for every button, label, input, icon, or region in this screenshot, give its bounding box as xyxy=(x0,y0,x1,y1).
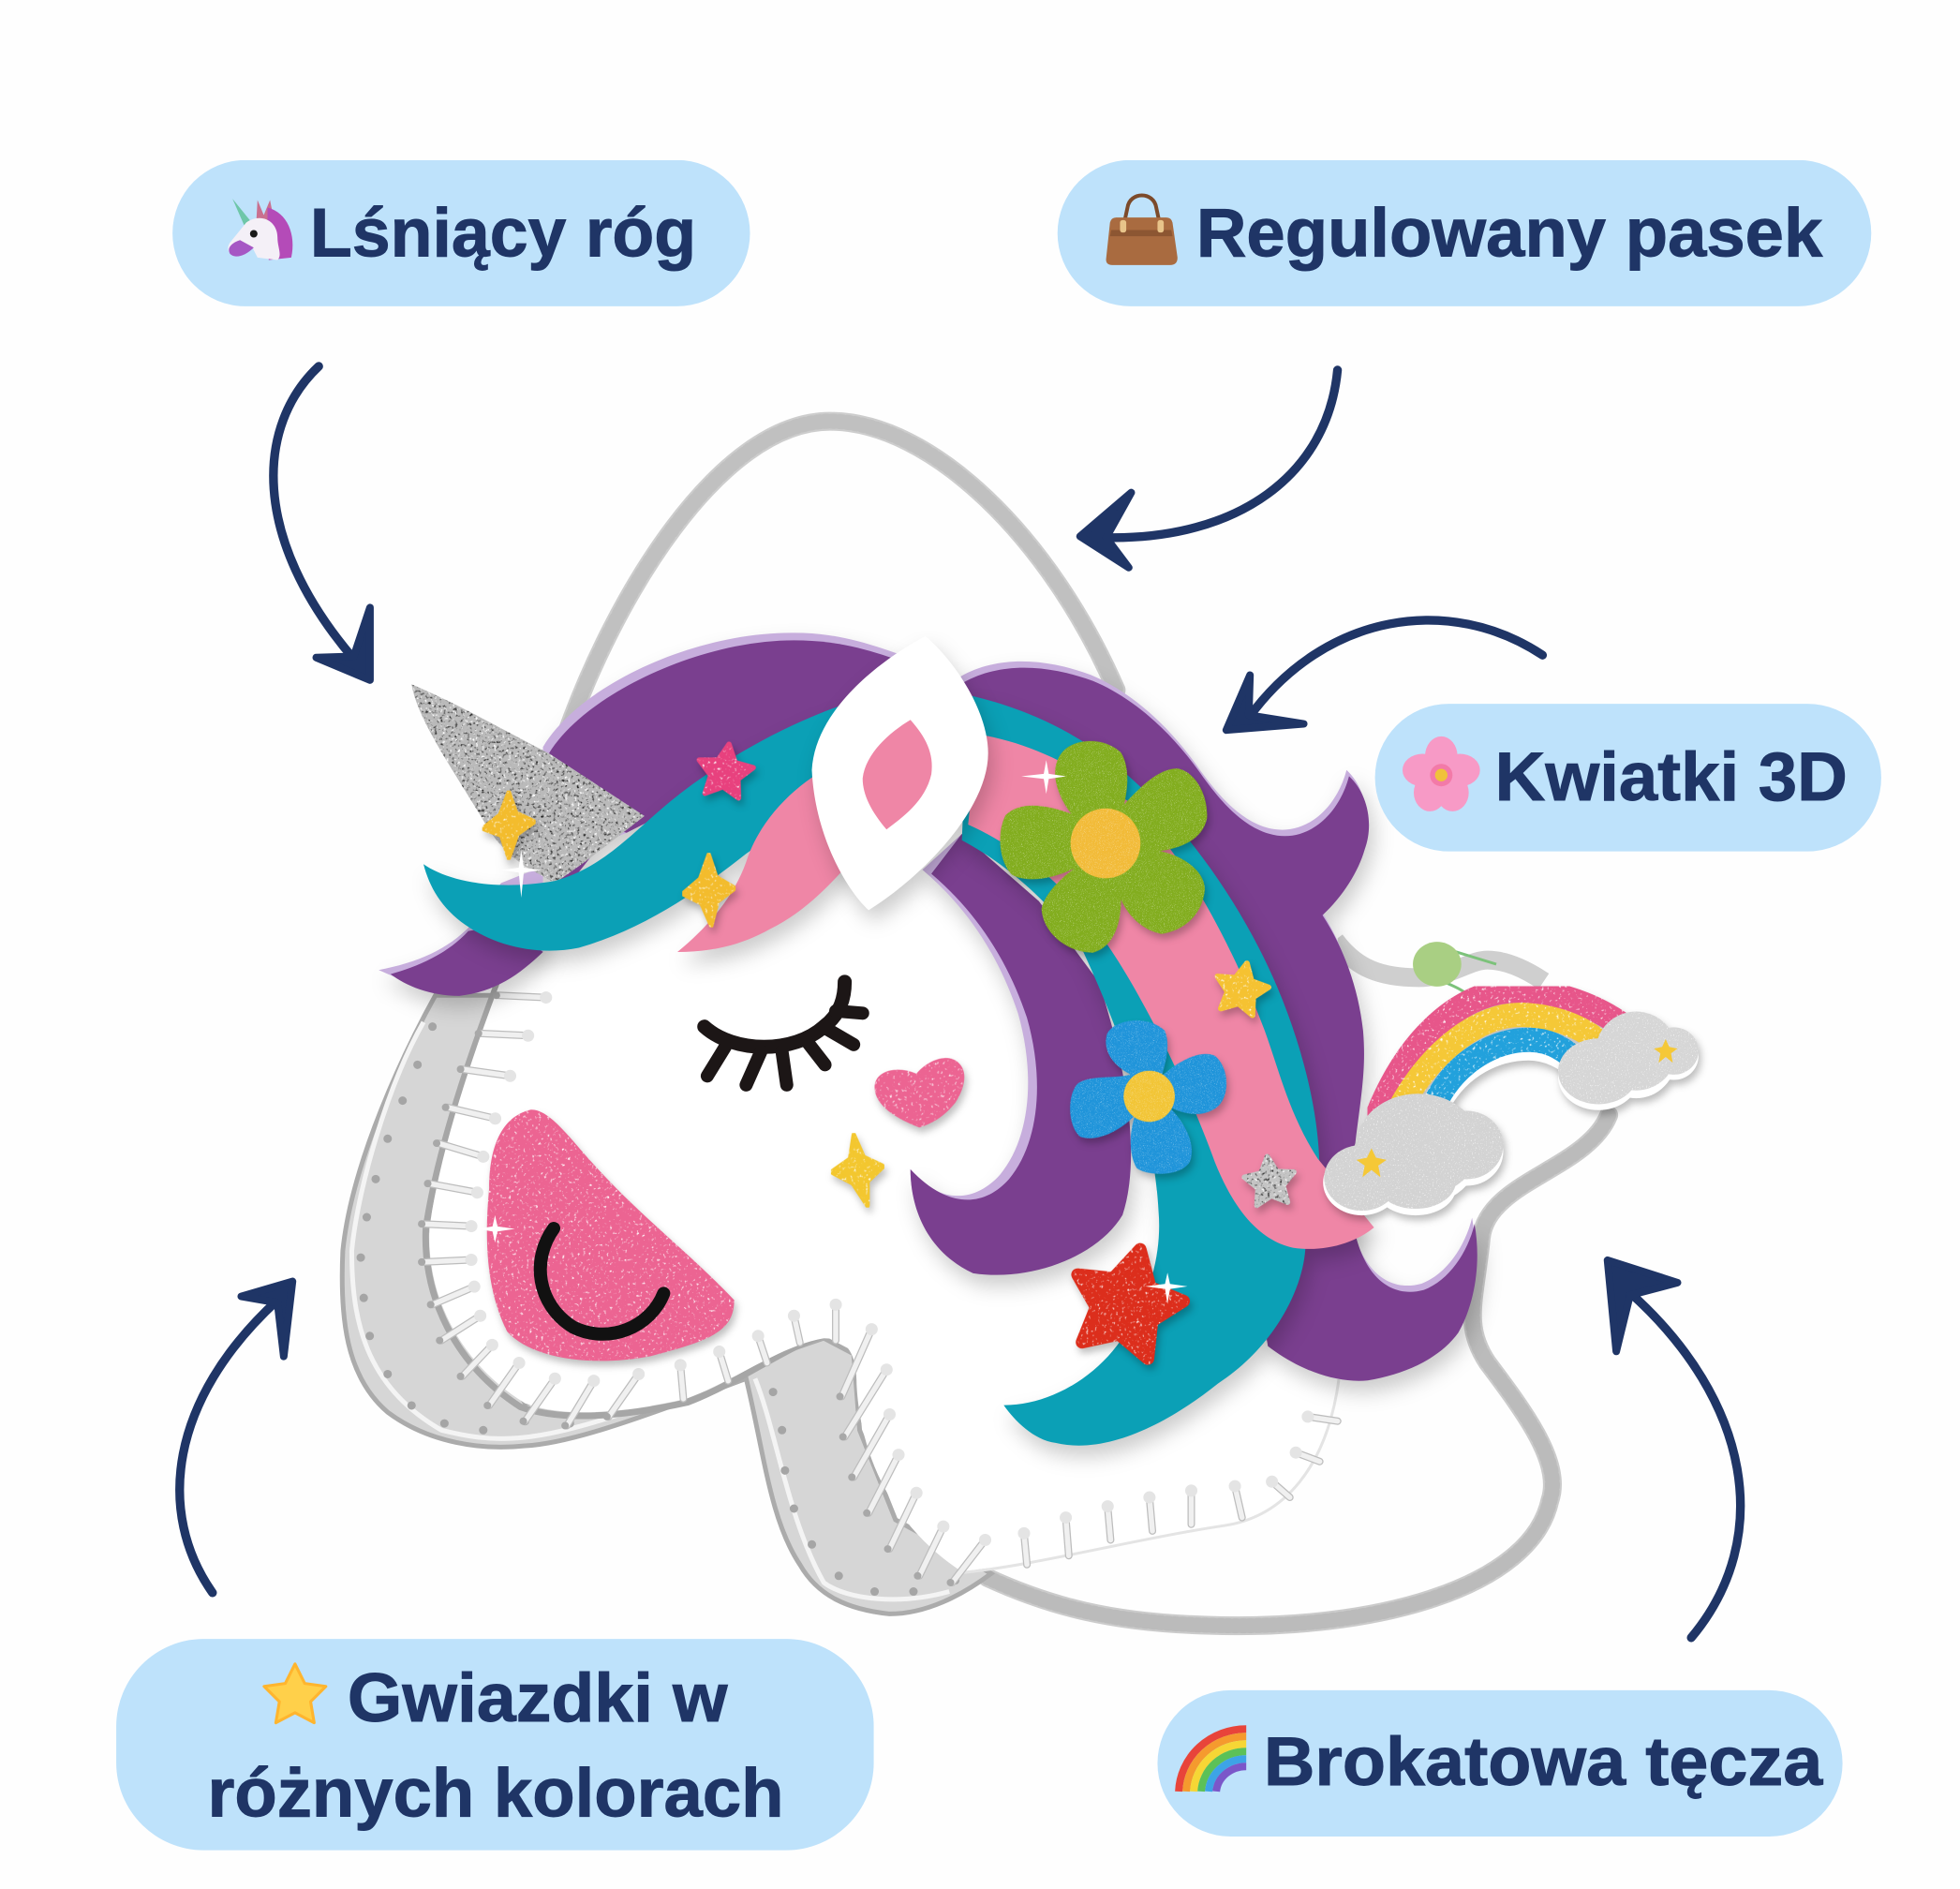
bag strap: connector to rainbow xyxy=(1335,940,1544,981)
text: Regulowany pasek xyxy=(1196,195,1822,272)
pink band xyxy=(1375,990,1628,1122)
stitching along the outer edge xyxy=(351,1022,949,1599)
star: gold on ribbon xyxy=(1211,958,1272,1018)
blue band xyxy=(1437,1040,1582,1099)
cloud glitter xyxy=(1558,1012,1699,1104)
purple top xyxy=(549,640,901,833)
tiny gold star xyxy=(1357,1148,1387,1177)
lilac edge xyxy=(379,632,901,979)
pill xyxy=(1058,160,1871,306)
label: shiny horn xyxy=(172,160,750,306)
yellow band xyxy=(1400,1015,1604,1108)
star: red xyxy=(1062,1236,1194,1363)
blue flower xyxy=(1070,1020,1226,1174)
pill xyxy=(116,1639,874,1851)
label: glitter rainbow xyxy=(1157,1690,1843,1837)
green petals xyxy=(1000,741,1207,953)
arrow: to flowers xyxy=(1226,620,1542,730)
pill xyxy=(1157,1690,1843,1837)
flower centre xyxy=(1071,809,1140,878)
cloud: left xyxy=(1323,1093,1503,1215)
inner bevel of the grey panel xyxy=(425,964,965,1569)
green flower xyxy=(1000,741,1207,953)
star: gold on forelock xyxy=(684,855,734,925)
star: pink top xyxy=(694,740,756,799)
lower edge line xyxy=(961,1379,1339,1572)
star: silver xyxy=(1242,1154,1297,1207)
mane: teal forelock xyxy=(423,706,866,952)
icon: rainbow xyxy=(1179,1729,1246,1792)
star: gold cheek xyxy=(833,1135,883,1205)
mane: top purple and forelock xyxy=(379,632,901,996)
blue petals xyxy=(1070,1020,1226,1174)
text: Kwiatki 3D xyxy=(1495,738,1848,815)
grey back panel of the bag xyxy=(342,995,991,1614)
white bag body xyxy=(429,802,1339,1572)
lacing stitches xyxy=(422,995,1338,1583)
smile xyxy=(541,1228,663,1334)
ear xyxy=(812,636,988,910)
pink forelock xyxy=(677,770,854,952)
arrow: to rainbow xyxy=(1608,1260,1741,1638)
glitter stickers xyxy=(483,740,1297,1363)
icon: handbag xyxy=(1106,195,1178,265)
arrow: to horn xyxy=(274,366,370,680)
icon: unicorn xyxy=(228,199,292,260)
heart xyxy=(874,1058,964,1127)
text: Lśniący róg xyxy=(310,195,696,272)
star: gold on horn xyxy=(483,793,534,857)
label: 3D flowers xyxy=(1375,704,1881,852)
nose patch xyxy=(487,1109,735,1361)
rainbow base xyxy=(1437,1047,1582,1102)
pill xyxy=(1375,704,1881,852)
text: różnych kolorach xyxy=(207,1755,784,1832)
pink ribbon xyxy=(968,734,1374,1249)
arrow: to strap xyxy=(1080,370,1338,568)
stitch holes xyxy=(361,1027,956,1592)
icon: blossom xyxy=(1403,736,1480,811)
purple tail xyxy=(391,925,543,996)
mane: inner purple lock xyxy=(911,834,1131,1275)
text: Gwiazdki w xyxy=(348,1659,728,1736)
closed eye with lashes xyxy=(705,982,863,1085)
label: stars in different colours xyxy=(116,1639,874,1851)
rainbow charm xyxy=(1375,990,1628,1122)
safety pin xyxy=(1413,942,1496,1004)
mane: right teal and pink ribbons xyxy=(962,695,1374,1446)
cloud glitter xyxy=(1324,1093,1503,1211)
text: Brokatowa tęcza xyxy=(1264,1723,1823,1800)
arrow: to stars xyxy=(180,1282,292,1593)
teal ribbon xyxy=(962,695,1319,1446)
bag strap: top handle xyxy=(565,422,1116,737)
bag strap: lower cord xyxy=(987,1115,1609,1626)
sparkles xyxy=(478,760,1187,1304)
flower centre xyxy=(1123,1071,1175,1122)
tiny gold star xyxy=(1654,1039,1678,1063)
label: adjustable strap xyxy=(1058,160,1871,306)
icon: star xyxy=(264,1664,326,1723)
mane: right side purple lobe xyxy=(934,662,1477,1381)
horn xyxy=(411,684,645,883)
inner ear xyxy=(863,720,932,829)
cloud: right xyxy=(1558,1012,1699,1110)
pill xyxy=(172,160,750,306)
